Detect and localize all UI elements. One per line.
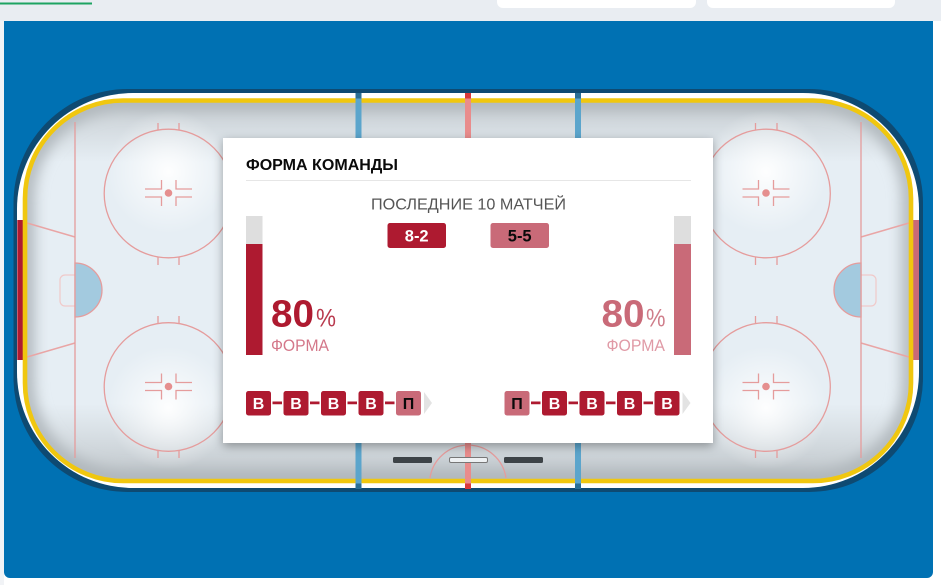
faceoff circle: top right: [702, 123, 830, 265]
home last five results: В: [253, 396, 264, 413]
faceoff circle: top left: [104, 123, 233, 265]
away form value: [602, 294, 666, 355]
hockey rink: [14, 89, 923, 492]
left page strip: [0, 21, 4, 585]
panel: team form: [223, 138, 713, 443]
away form value: ФОРМА: [606, 337, 665, 355]
form bar: away 80%: [674, 216, 691, 355]
home form value: 80: [271, 294, 314, 336]
form bar: home 80%: [246, 216, 262, 355]
blue line: right: [575, 93, 581, 489]
away last five results: [504, 391, 690, 416]
ice surface: [26, 102, 910, 479]
away last five results: П: [511, 396, 523, 413]
end bar: away team: [911, 220, 919, 360]
home form value: ФОРМА: [271, 337, 329, 355]
blue line: left: [356, 93, 362, 489]
home last five results: [246, 391, 432, 416]
away last five results: В: [549, 396, 560, 413]
away last five results: В: [586, 396, 598, 413]
home last five results: В: [328, 396, 339, 413]
subtitle: ПОСЛЕДНИЕ 10 МАТЧЕЙ: [371, 194, 566, 214]
scorer benches: [393, 457, 543, 463]
record badge: away: 5-5: [508, 228, 532, 246]
faceoff circle: bottom right: [702, 316, 830, 458]
away last five results: В: [661, 396, 673, 413]
rink white boards: [17, 93, 919, 488]
home form value: %: [316, 304, 336, 332]
record badge: away: [490, 223, 549, 248]
home last five results: В: [365, 396, 377, 413]
top navigation bar: [0, 0, 941, 21]
rink outer border: [14, 89, 923, 492]
panel background: [223, 138, 713, 443]
away form value: %: [646, 304, 666, 332]
yellow kick plate: [25, 100, 911, 481]
heading: ФОРМА КОМАНДЫ: [246, 157, 398, 174]
home last five results: В: [290, 396, 302, 413]
home last five results: П: [403, 396, 414, 413]
away last five results: В: [624, 396, 635, 413]
end bar: home team: [17, 220, 25, 360]
faceoff circle: bottom left: [104, 316, 233, 458]
record badge: home: [388, 223, 446, 248]
record badge: home: 8-2: [405, 228, 429, 246]
away form value: 80: [602, 294, 644, 336]
home form value: [271, 294, 336, 355]
red center line: [465, 93, 471, 489]
